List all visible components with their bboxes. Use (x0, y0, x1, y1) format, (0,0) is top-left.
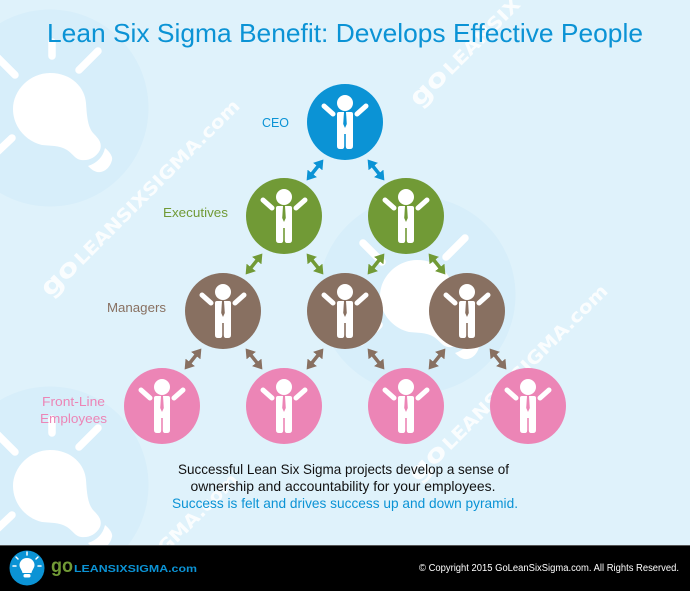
label: Front-Line Employees (40, 394, 108, 426)
watermark: bottom right (402, 276, 613, 487)
node: front-line 3 (368, 368, 444, 444)
node: manager left (185, 273, 261, 349)
footer bar (0, 545, 690, 591)
text block: summary: ownership and accountability for your employees. (190, 478, 496, 494)
arrows: managers to front-line (189, 354, 502, 364)
logo wordmark (51, 556, 197, 577)
watermark: top right: LEANSIX (440, 0, 525, 80)
label: CEO: CEO (262, 115, 289, 130)
node: manager centre (307, 273, 383, 349)
logo wordmark: LEANSIXSIGMA.com (74, 564, 197, 575)
node: CEO (307, 84, 383, 160)
watermark: bottom left: GMA.com (154, 469, 243, 559)
node: front-line 1 (124, 368, 200, 444)
node: front-line 2 (246, 368, 322, 444)
watermark: left (34, 91, 245, 302)
label: Front-Line Employees: Front-Line (42, 394, 105, 409)
watermark: left: go (34, 251, 85, 302)
node: front-line 4 (490, 368, 566, 444)
text block: summary (172, 461, 518, 511)
background icon: light bulb centre (318, 196, 516, 394)
background icon: light bulb bottom left (0, 416, 112, 545)
text block: summary: Successful Lean Six Sigma projects develop a sense of (178, 461, 509, 477)
watermark: bottom right: go (402, 436, 453, 487)
arrows: executives to managers (250, 259, 441, 269)
label: Executives: Executives (163, 205, 229, 220)
title: Lean Six Sigma Benefit: Develops Effective People (47, 18, 643, 48)
watermark: top right: go (403, 61, 454, 112)
arrows: CEO to executives (311, 165, 380, 175)
node: manager right (429, 273, 505, 349)
copyright: © Copyright 2015 GoLeanSixSigma.com. All Rights Reserved. (419, 563, 679, 574)
text block: summary: Success is felt and drives success up and down pyramid. (172, 495, 518, 511)
watermark: bottom right: LEANSIXSIGMA.com (439, 281, 612, 455)
watermark: left: LEANSIXSIGMA.com (71, 96, 244, 270)
node: executive right (368, 178, 444, 254)
logo wordmark: go (51, 556, 73, 577)
background icon: light bulb top left (0, 38, 112, 172)
node: executive left (246, 178, 322, 254)
watermark: top right (403, 0, 526, 112)
label: Managers: Managers (107, 300, 167, 315)
logo icon: bulb (10, 550, 44, 586)
label: Front-Line Employees: Employees (40, 411, 108, 426)
